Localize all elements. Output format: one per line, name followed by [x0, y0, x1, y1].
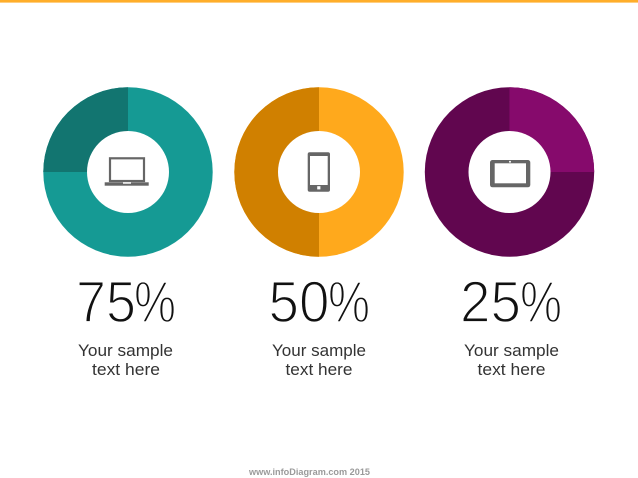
caption: 25%	[464, 342, 559, 379]
caption: 75%: text here	[92, 361, 160, 379]
percentage: 75%: %	[134, 270, 176, 335]
icon: laptop	[105, 158, 149, 186]
caption: 75%	[78, 342, 173, 379]
percentage: 50%	[268, 270, 370, 335]
top accent bar	[0, 0, 638, 3]
donut chart: 75%	[43, 87, 213, 257]
footer credit: www.infoDiagram.com 2015	[248, 467, 371, 478]
percentage: 50%: 50	[268, 270, 330, 335]
percentage: 50%: %	[328, 270, 370, 335]
caption: 75%: Your sample	[78, 342, 173, 360]
caption: 50%: text here	[286, 361, 352, 379]
caption: 25%: Your sample	[464, 342, 559, 360]
icon: tablet	[490, 160, 530, 187]
caption: 25%: text here	[478, 361, 546, 379]
percentage: 75%	[76, 270, 176, 335]
panel: 25% tablet	[425, 87, 594, 379]
caption: 50%	[272, 342, 366, 379]
percentage: 25%: %	[520, 270, 562, 335]
percentage: 75%: 75	[76, 270, 136, 335]
donut chart: 50%	[234, 87, 404, 257]
percentage: 25%: 25	[460, 270, 521, 335]
donut chart: 25%	[425, 87, 594, 257]
icon: smartphone	[308, 152, 330, 192]
percentage: 25%	[460, 270, 562, 335]
panel: 75% laptop	[43, 87, 213, 379]
panel: 50% phone	[234, 87, 404, 379]
caption: 50%: Your sample	[272, 342, 366, 360]
